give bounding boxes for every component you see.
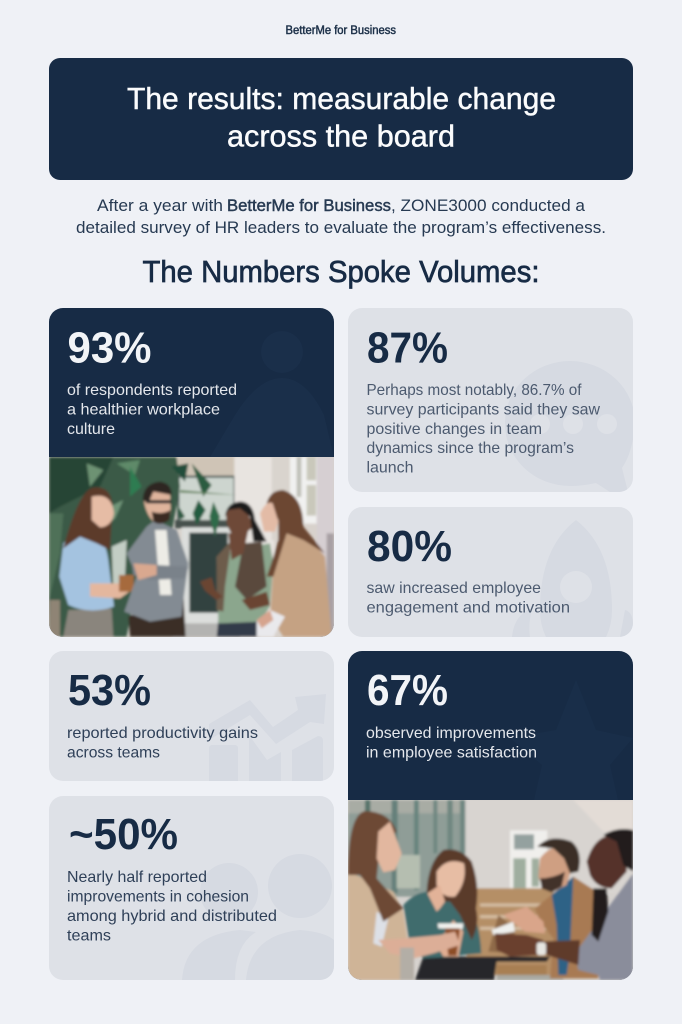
person 3: green top, brown vest <box>200 502 273 637</box>
panel: 87% team dynamics <box>348 308 635 492</box>
panel: 67% satisfaction <box>348 651 633 980</box>
description: 93%: a healthier workplace <box>67 402 220 418</box>
description: 87%: Perhaps most notably, 86.7% of <box>366 382 582 399</box>
brand name: BetterMe for Business <box>286 25 396 37</box>
person 4: tan blazer <box>257 490 332 637</box>
stat: 67%: 67% <box>367 666 448 715</box>
person 2: grey blazer <box>124 482 188 637</box>
description: ~50%: among hybrid and distributed <box>67 908 277 925</box>
stat: 93%: 93% <box>68 324 152 372</box>
stat: 80%: 80% <box>367 522 452 571</box>
description: ~50%: Nearly half reported <box>67 869 207 886</box>
icon: rocket watermark <box>620 624 633 637</box>
title banner: The results: measurable change <box>127 81 556 116</box>
stat: 53%: 53% <box>68 666 151 715</box>
description: 93%: culture <box>67 421 115 438</box>
icon: two people watermark <box>320 966 334 980</box>
description: 67% <box>366 725 537 762</box>
description: 80% <box>366 580 570 616</box>
description: ~50% <box>67 869 277 944</box>
panel: ~50% cohesion <box>49 796 334 980</box>
icon: faint star watermark <box>510 680 633 800</box>
description: 80%: saw increased employee <box>366 580 541 597</box>
description: ~50%: teams <box>67 928 111 944</box>
intro paragraph: After a year with <box>97 197 223 215</box>
photo: four colleagues talking in an office hallway <box>49 457 334 637</box>
person 1: light blue shirt <box>59 487 134 637</box>
icon: faint people watermark <box>210 331 334 457</box>
description: 67%: in employee satisfaction <box>366 744 537 762</box>
title banner <box>49 58 633 180</box>
person 1: tan blazer <box>348 811 460 980</box>
description: 93%: of respondents reported <box>67 382 237 399</box>
description: 53%: reported productivity gains <box>67 725 258 742</box>
icon: rising chart watermark <box>320 780 322 781</box>
description: 53%: across teams <box>67 744 160 762</box>
description: 87%: positive changes in team <box>366 421 542 438</box>
intro paragraph: , ZONE3000 conducted a <box>391 197 586 215</box>
intro paragraph <box>76 197 606 237</box>
intro paragraph: BetterMe for Business <box>227 197 391 215</box>
description: 87%: survey participants said they saw <box>366 402 600 418</box>
description: 87% <box>366 382 600 476</box>
panel: 53% productivity <box>49 651 334 785</box>
description: 80%: engagement and motivation <box>366 600 570 616</box>
description: 67%: observed improvements <box>366 725 536 742</box>
stat: ~50%: ~50% <box>69 810 178 859</box>
coffee cups and bag <box>488 907 545 957</box>
panel: 93% healthier culture <box>49 308 334 637</box>
icon: speech bubble watermark <box>619 490 626 492</box>
person 4: grey blazer <box>537 829 633 980</box>
title banner: across the board <box>227 118 455 154</box>
description: 87%: dynamics since the program’s <box>366 440 574 457</box>
description: ~50%: improvements in cohesion <box>67 888 249 906</box>
photo: four colleagues laughing around a cafe table <box>348 800 633 980</box>
description: 53% <box>68 726 258 758</box>
panel: 80% engagement <box>348 507 633 637</box>
section heading: The Numbers Spoke Volumes: <box>142 254 540 289</box>
person 3: tan blazer, blue shirt <box>535 838 598 978</box>
table: dark cafe table <box>415 957 550 980</box>
stat: 87%: 87% <box>367 324 448 372</box>
intro paragraph: detailed survey of HR leaders to evaluate the program’s effectiveness. <box>76 219 606 237</box>
description: 93% <box>68 384 236 434</box>
person 2: teal jacket <box>403 849 481 958</box>
description: 87%: launch <box>366 460 414 476</box>
